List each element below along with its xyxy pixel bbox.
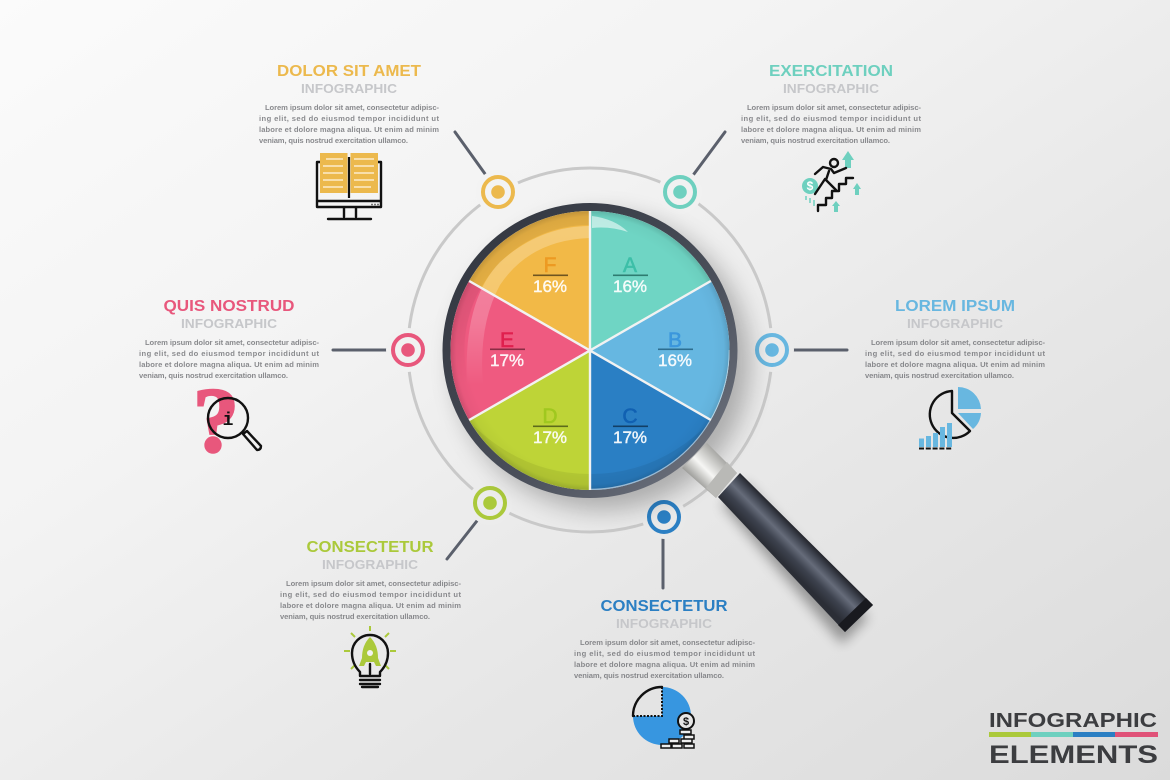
block: lorem ipsum: ing elit, sed do eiusmod tempor incididunt ut bbox=[865, 349, 1045, 358]
block: lorem ipsum: Lorem ipsum dolor sit amet, consectetur adipisc- bbox=[871, 338, 1045, 347]
node: dark blue bbox=[642, 495, 686, 539]
block: lorem ipsum: labore et dolore magna aliqua. Ut enim ad minim bbox=[865, 360, 1045, 369]
node: green bbox=[468, 481, 512, 525]
block: exercitation: ing elit, sed do eiusmod tempor incididunt ut bbox=[741, 114, 921, 123]
block: consectetur blue: labore et dolore magna aliqua. Ut enim ad minim bbox=[574, 660, 755, 669]
block: exercitation: labore et dolore magna aliqua. Ut enim ad minim bbox=[741, 125, 921, 134]
block: consectetur green: veniam, quis nostrud exercitation ullamco. bbox=[280, 612, 430, 621]
block: consectetur green: ing elit, sed do eiusmod tempor incididunt ut bbox=[280, 590, 461, 599]
slice labels: E bbox=[500, 329, 514, 352]
block: dolor sit amet: labore et dolore magna aliqua. Ut enim ad minim bbox=[259, 125, 439, 134]
block: exercitation: INFOGRAPHIC bbox=[783, 81, 880, 96]
node: pink bbox=[386, 328, 430, 372]
slice B bbox=[590, 280, 731, 421]
block: consectetur green: INFOGRAPHIC bbox=[322, 557, 419, 572]
block: consectetur blue bbox=[574, 598, 755, 680]
slice labels: 16% bbox=[533, 277, 567, 296]
slice A bbox=[590, 210, 712, 350]
slice labels: C bbox=[622, 405, 638, 428]
block: lorem ipsum: veniam, quis nostrud exercitation ullamco. bbox=[865, 371, 1014, 380]
block: dolor sit amet: INFOGRAPHIC bbox=[301, 81, 398, 96]
logo: ELEMENTS bbox=[989, 741, 1158, 769]
lens shading bbox=[448, 205, 730, 495]
slice labels: 17% bbox=[490, 351, 524, 370]
handle collar bbox=[682, 443, 737, 498]
slice D bbox=[468, 350, 590, 491]
node: yellow bbox=[476, 170, 520, 214]
block: dolor sit amet: DOLOR SIT AMET bbox=[277, 63, 422, 80]
block: consectetur blue: veniam, quis nostrud exercitation ullamco. bbox=[574, 671, 724, 680]
slice C bbox=[590, 350, 712, 491]
logo bbox=[989, 710, 1158, 769]
block: quis nostrud: labore et dolore magna aliqua. Ut enim ad minim bbox=[139, 360, 319, 369]
block: consectetur green: CONSECTETUR bbox=[306, 539, 434, 556]
block: consectetur blue: CONSECTETUR bbox=[600, 598, 728, 615]
handle bbox=[718, 473, 873, 632]
block: quis nostrud: veniam, quis nostrud exercitation ullamco. bbox=[139, 371, 288, 380]
slice labels: F bbox=[544, 254, 556, 277]
block: consectetur green bbox=[280, 539, 461, 621]
icon: runner on stairs bbox=[802, 151, 861, 212]
connector lines bbox=[333, 132, 847, 588]
icon: pie with coins bbox=[633, 687, 694, 748]
block: quis nostrud bbox=[139, 298, 319, 380]
block: exercitation: EXERCITATION bbox=[769, 63, 893, 80]
block: lorem ipsum: INFOGRAPHIC bbox=[907, 316, 1004, 331]
slice labels: 17% bbox=[613, 428, 647, 447]
block: quis nostrud: Lorem ipsum dolor sit amet, consectetur adipisc- bbox=[145, 338, 319, 347]
lens rim bbox=[446, 207, 734, 494]
block: consectetur green: Lorem ipsum dolor sit amet, consectetur adipisc- bbox=[286, 579, 461, 588]
block: dolor sit amet: ing elit, sed do eiusmod tempor incididunt ut bbox=[259, 114, 439, 123]
block: consectetur blue: Lorem ipsum dolor sit amet, consectetur adipisc- bbox=[580, 638, 755, 647]
slice dividers bbox=[464, 205, 716, 496]
slice labels: D bbox=[542, 405, 558, 428]
block: exercitation: Lorem ipsum dolor sit amet, consectetur adipisc- bbox=[747, 103, 921, 112]
slice labels: 16% bbox=[658, 351, 692, 370]
block: consectetur blue: ing elit, sed do eiusmod tempor incididunt ut bbox=[574, 649, 755, 658]
slice labels: 16% bbox=[613, 277, 647, 296]
icon: pie and bars bbox=[919, 387, 981, 448]
node: teal bbox=[658, 170, 702, 214]
slice labels: A bbox=[623, 254, 637, 277]
block: exercitation: veniam, quis nostrud exercitation ullamco. bbox=[741, 136, 890, 145]
block: lorem ipsum bbox=[865, 298, 1045, 380]
slice F bbox=[468, 210, 590, 350]
shadows bbox=[454, 214, 868, 644]
block: dolor sit amet bbox=[259, 63, 439, 145]
outer orbit ring bbox=[408, 168, 772, 532]
pie chart bbox=[448, 205, 731, 496]
block: consectetur blue: INFOGRAPHIC bbox=[616, 616, 713, 631]
block: quis nostrud: QUIS NOSTRUD bbox=[164, 298, 294, 315]
block: exercitation bbox=[741, 63, 921, 145]
slice labels: B bbox=[668, 329, 682, 352]
slice E bbox=[449, 280, 590, 421]
slice labels: 17% bbox=[533, 428, 567, 447]
icon: rocket bulb bbox=[344, 626, 396, 687]
block: dolor sit amet: Lorem ipsum dolor sit amet, consectetur adipisc- bbox=[265, 103, 439, 112]
block: quis nostrud: INFOGRAPHIC bbox=[181, 316, 278, 331]
magnifying glass bbox=[446, 205, 873, 644]
icon: runner on stairs: $ bbox=[807, 179, 814, 193]
logo: INFOGRAPHIC bbox=[989, 710, 1157, 732]
block: dolor sit amet: veniam, quis nostrud exercitation ullamco. bbox=[259, 136, 408, 145]
icon: pie with coins: $ bbox=[683, 716, 689, 728]
block: consectetur green: labore et dolore magna aliqua. Ut enim ad minim bbox=[280, 601, 461, 610]
slice labels bbox=[490, 254, 693, 447]
block: lorem ipsum: LOREM IPSUM bbox=[895, 298, 1015, 315]
icon: question magnifier: i bbox=[223, 411, 234, 431]
icon: question magnifier bbox=[193, 369, 261, 471]
block: quis nostrud: ing elit, sed do eiusmod tempor incididunt ut bbox=[139, 349, 319, 358]
icon: question magnifier: ? bbox=[193, 369, 239, 471]
node: light blue bbox=[750, 328, 794, 372]
icon: book on monitor bbox=[317, 153, 381, 219]
